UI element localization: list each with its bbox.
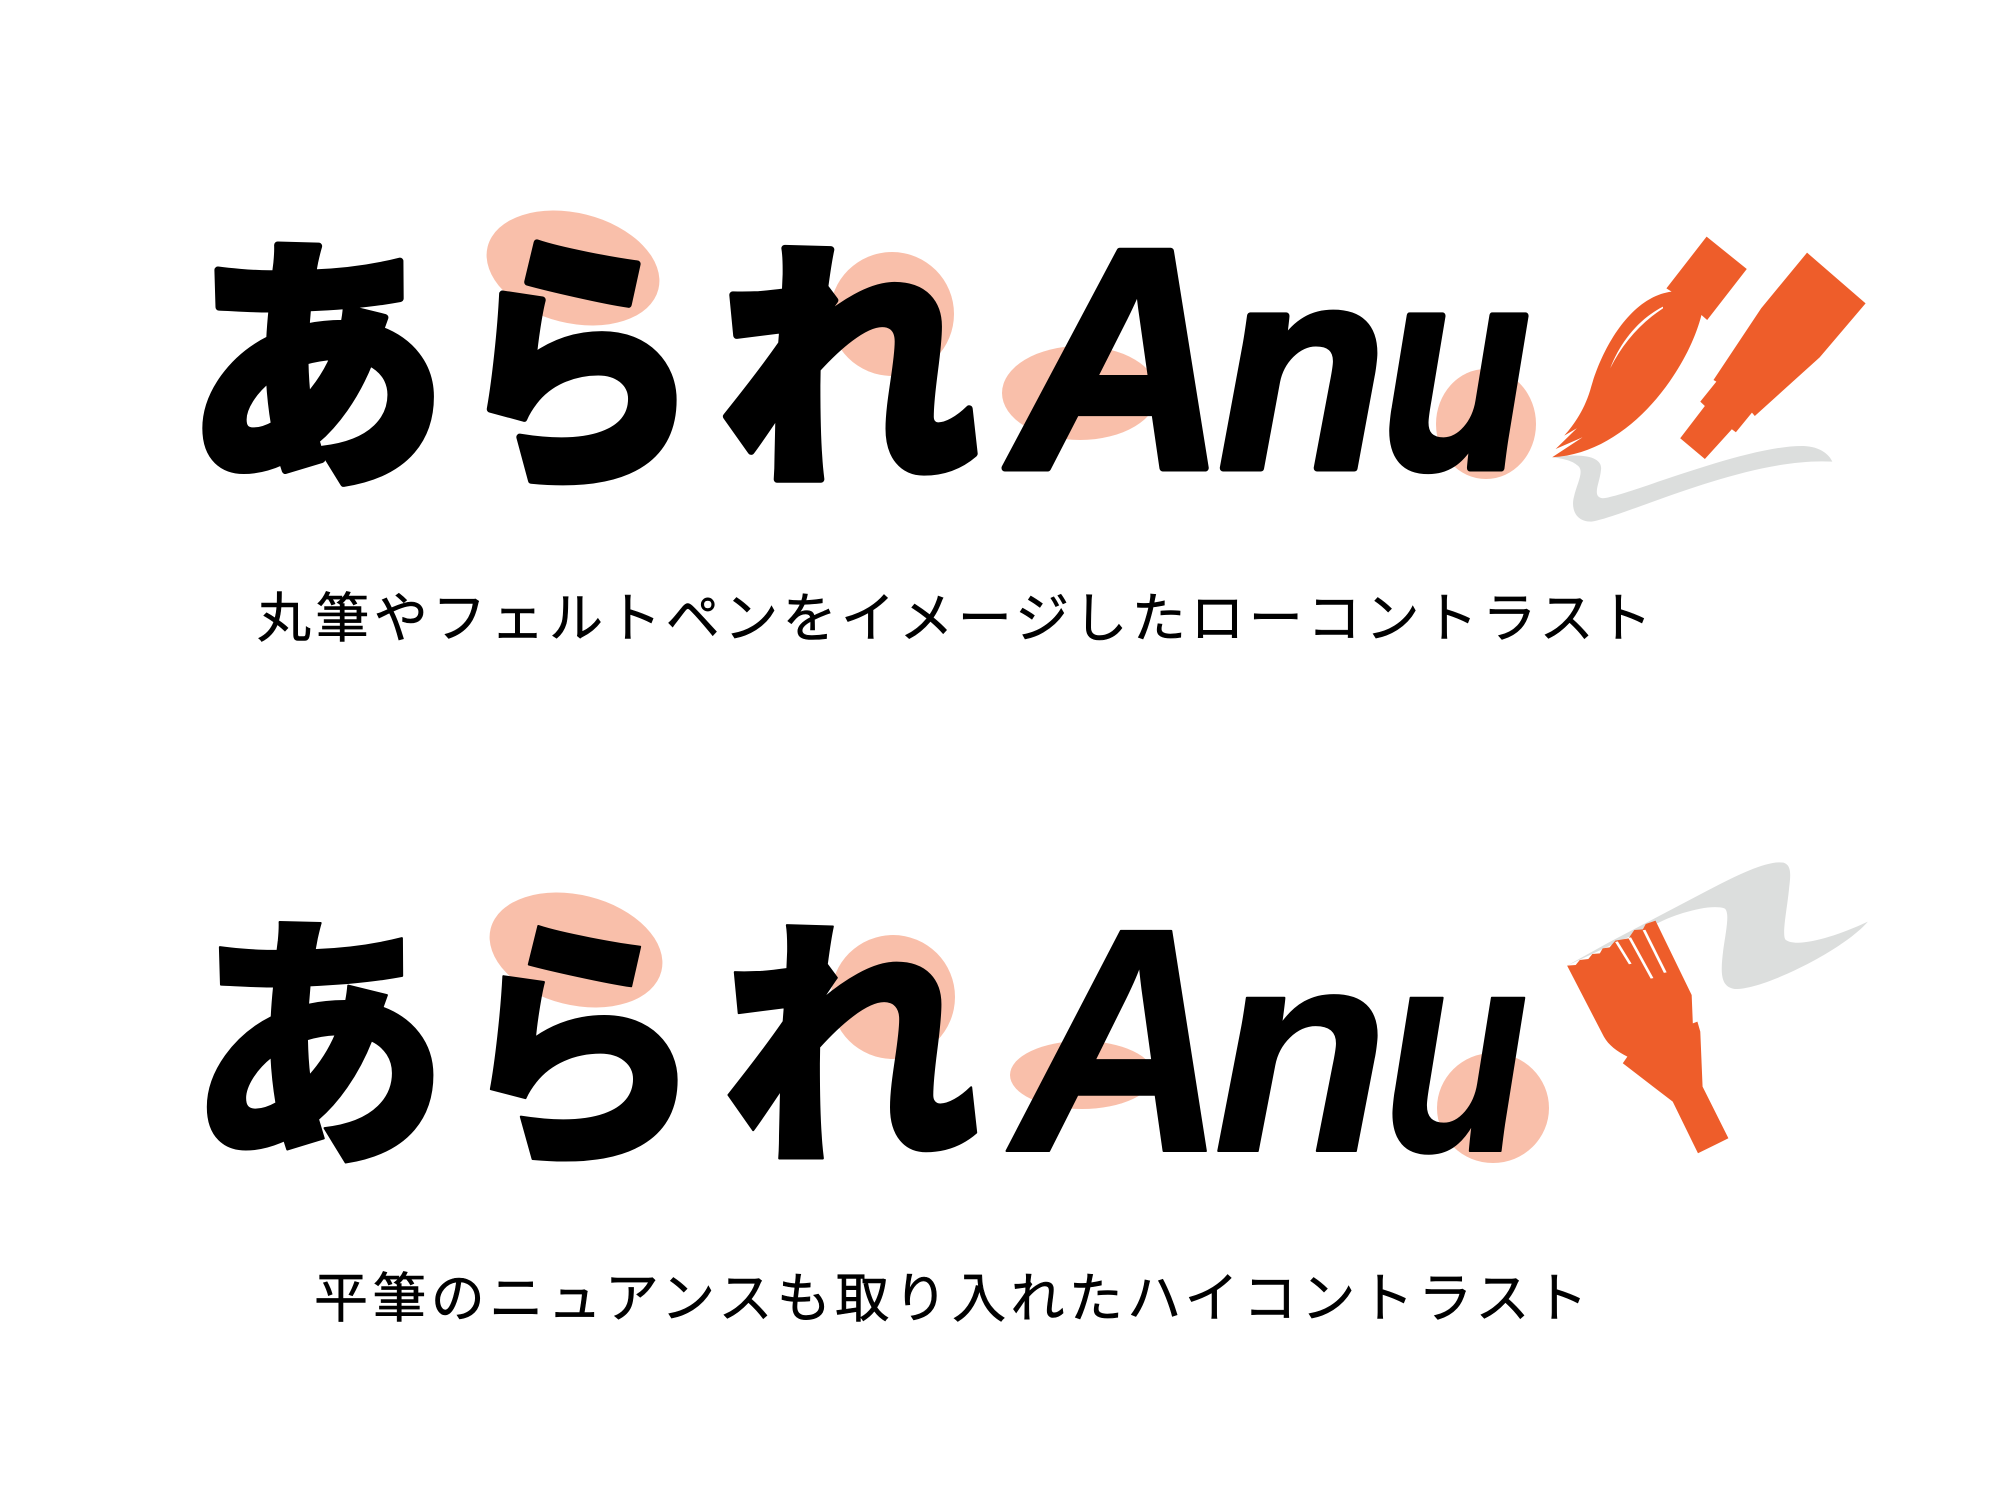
wordmark: high contrast xyxy=(186,862,1529,1219)
wordmark: high contrast: あ xyxy=(186,897,450,1201)
caption: low contrast: 丸筆やフェルトペンをイメージしたローコントラスト xyxy=(257,589,1656,649)
accent blobs: high contrast xyxy=(477,875,1549,1163)
caption: high contrast: 平筆のニュアンスも取り入れたハイコントラスト xyxy=(314,1269,1592,1329)
wordmark: low contrast: れ xyxy=(718,226,980,520)
wordmark: high contrast: れ xyxy=(720,904,982,1200)
wordmark: low contrast: u xyxy=(1382,208,1530,530)
brush highlight xyxy=(1610,307,1663,368)
wordmark: low contrast: ら xyxy=(455,219,701,522)
brush stroke shadow xyxy=(1552,446,1832,522)
wordmark: low contrast: あ xyxy=(185,223,447,522)
round brush xyxy=(1552,237,1747,457)
wordmark: high contrast: n xyxy=(1213,890,1389,1213)
icon: flat brush xyxy=(1567,862,1868,1153)
panel: low contrast logo xyxy=(185,184,1866,536)
wordmark: low contrast: A xyxy=(1002,184,1227,536)
bristle lines xyxy=(1616,930,1665,978)
accent blobs: low contrast xyxy=(474,193,1536,479)
wordmark: low contrast xyxy=(185,184,1530,536)
flat brush xyxy=(1567,921,1728,1153)
icon: round brush and felt pen xyxy=(1552,237,1866,522)
felt pen xyxy=(1680,253,1866,459)
wordmark: high contrast: A xyxy=(1003,862,1227,1219)
wordmark: high contrast: ら xyxy=(455,903,705,1200)
panel: high contrast logo xyxy=(186,862,1868,1219)
wordmark: low contrast: n xyxy=(1218,208,1386,530)
flat brush stroke shadow xyxy=(1567,862,1868,989)
wordmark: high contrast: u xyxy=(1383,890,1529,1213)
